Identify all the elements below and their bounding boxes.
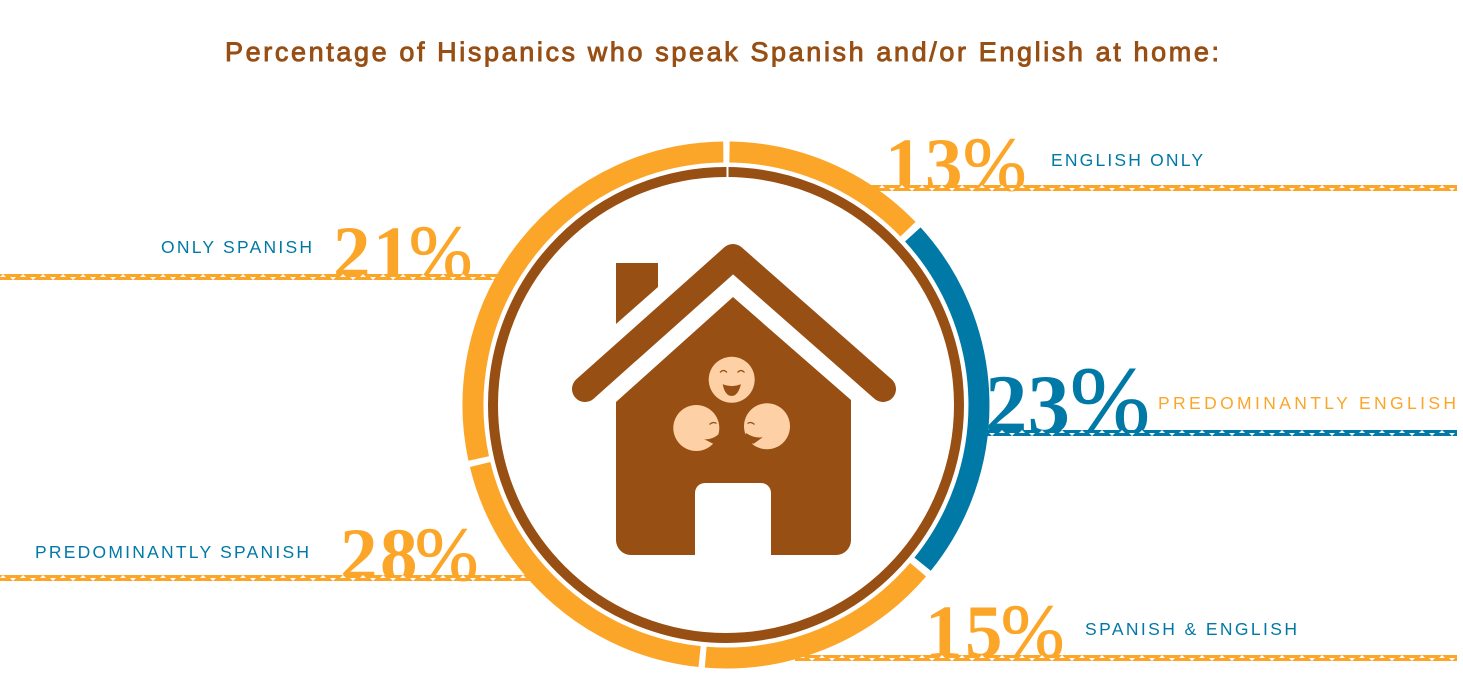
callout: 21% only spanish: ONLY SPANISH	[161, 237, 312, 257]
callout: 28% predominantly spanish: %	[415, 513, 478, 597]
icon: house with family	[585, 257, 883, 555]
inner brown ring	[493, 165, 959, 638]
segment: predominantly english	[913, 234, 979, 564]
title: Percentage of Hispanics who speak Spanish and/or English at home:	[225, 37, 1219, 67]
callout: 21% only spanish: 21	[333, 212, 413, 295]
callout: 13% english only: 13	[885, 124, 965, 207]
face: right	[743, 403, 790, 449]
segment: english only	[730, 152, 908, 229]
callout: 28% predominantly spanish: PREDOMINANTLY SPANISH	[35, 542, 309, 562]
segment: spanish and english	[706, 570, 918, 658]
callout: 15% spanish and english: 15	[925, 591, 1005, 674]
callout: 23% predominantly english: %	[1070, 347, 1150, 454]
chimney	[616, 263, 658, 324]
callout: 13% english only	[866, 123, 1457, 207]
callout: 13% english only: ENGLISH ONLY	[1051, 150, 1203, 170]
callout: 21% only spanish: %	[409, 211, 472, 295]
callout: 21% only spanish	[0, 211, 500, 295]
house body	[616, 297, 851, 555]
callout: 23% predominantly english: PREDOMINANTLY ENGLISH	[1158, 393, 1456, 413]
callout: 28% predominantly spanish	[0, 513, 530, 597]
segment: predominantly spanish	[480, 464, 700, 657]
callout: 15% spanish and english: SPANISH & ENGLISH	[1085, 619, 1297, 639]
segment: only spanish	[473, 152, 723, 458]
face: left	[673, 405, 722, 451]
outer donut ring	[473, 152, 979, 658]
callout: 28% predominantly spanish: 28	[340, 514, 420, 597]
callout: 15% spanish and english	[795, 590, 1457, 674]
roof	[585, 257, 883, 389]
callout: 13% english only: %	[963, 123, 1026, 207]
callout: 23% predominantly english: 23	[985, 358, 1070, 452]
callout: 15% spanish and english: %	[1001, 590, 1064, 674]
callout: 23% predominantly english	[985, 347, 1457, 454]
face: top	[709, 357, 755, 403]
